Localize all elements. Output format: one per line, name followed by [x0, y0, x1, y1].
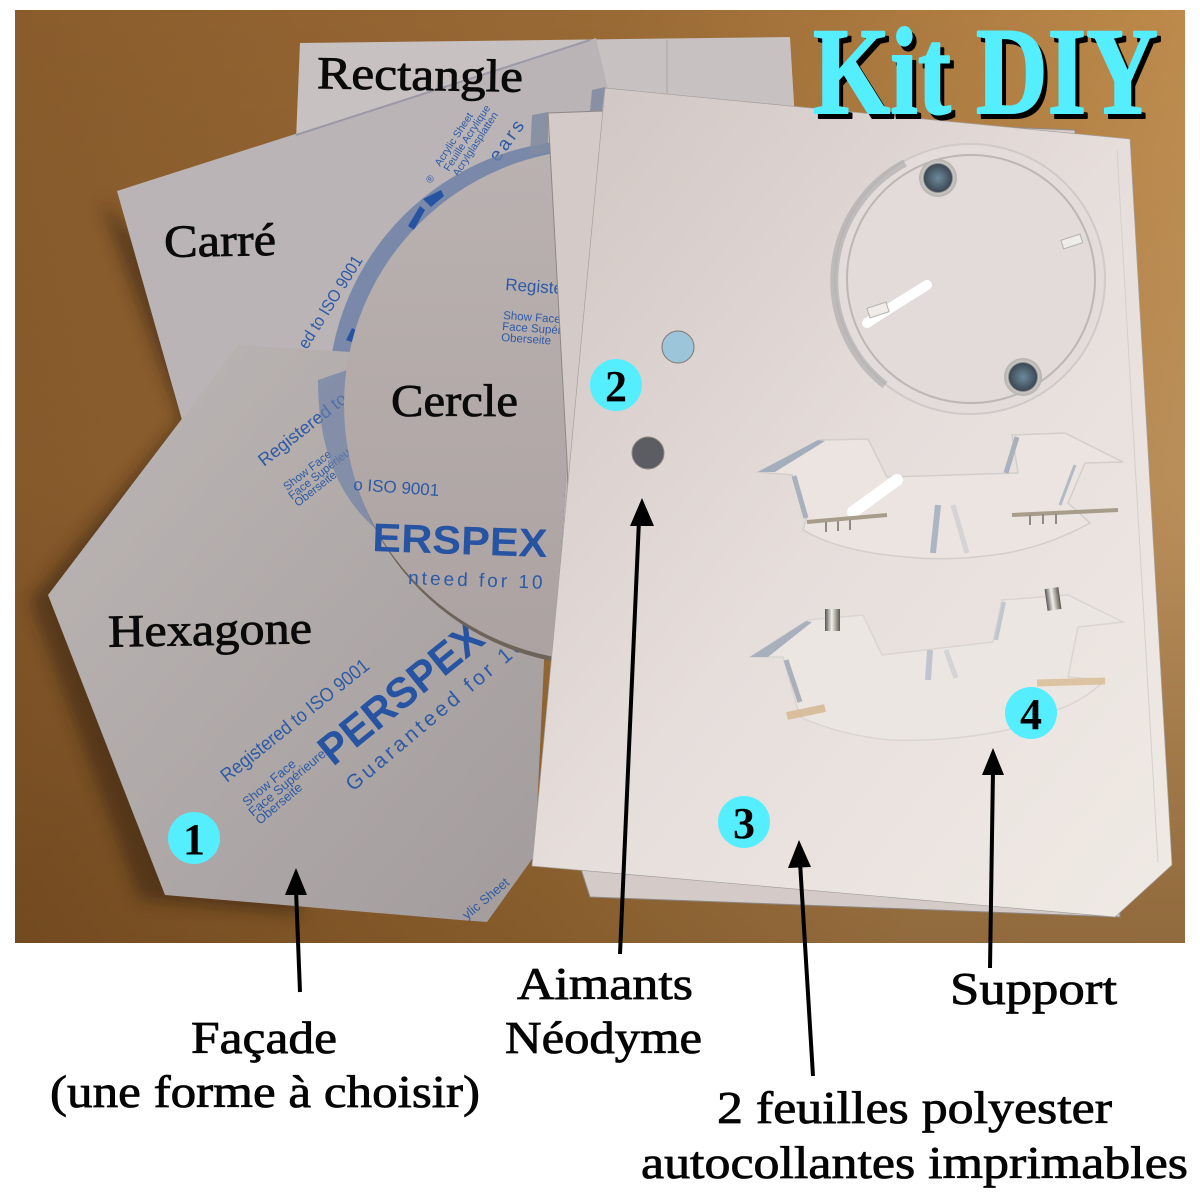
badge: number 3: 3 [733, 799, 755, 848]
text: hexagon blue print lower: Face Supérieure [245, 746, 329, 819]
icon: magnet top of circle [919, 159, 957, 197]
panel: sheet top shadows [530, 87, 605, 155]
text: circle blue print: Face Supérieure [502, 321, 587, 339]
text: hexagon blue print lower: Registered to ISO 9001 [216, 655, 374, 787]
arrow: support [982, 748, 1004, 968]
label: Hexagone: Hexagone [108, 602, 312, 657]
label: 2 feuilles polyester: 2 feuilles polyester [717, 1082, 1112, 1133]
icon: loose magnet dark [632, 437, 664, 469]
arrow: feuilles [788, 840, 813, 1076]
photo: wood table background [15, 10, 1185, 943]
label: Support: Support [950, 963, 1117, 1014]
panel: circle shadow over hexagon [318, 370, 377, 530]
text: hexagon blue print lower: Guaranteed for 10 [341, 631, 531, 796]
text: circle blue print: Show Face [503, 310, 561, 326]
panel: sticky sheet 1 (front) [532, 88, 1172, 917]
text: square sheet blue print: ears [485, 114, 531, 166]
label: autocollantes imprimables: autocollantes imprimables [641, 1137, 1188, 1188]
panel: circle acrylic sheet [344, 154, 566, 661]
panel: rectangle acrylic sheet [296, 37, 795, 140]
text: square sheet blue print: ed to ISO 9001 [294, 252, 367, 352]
icon: loose magnet light [662, 331, 694, 363]
text: circle blue print [353, 275, 588, 594]
text: circle blue print: nteed for 10 [408, 568, 546, 594]
text: square sheet blue print [294, 103, 531, 352]
label: Aimants: Aimants [517, 958, 693, 1009]
icon: acrylic support upper [758, 433, 1123, 559]
icon: acrylic support lower [750, 587, 1123, 740]
panel: sticky sheet 2 (back) [548, 111, 1120, 917]
label: Néodyme: Néodyme [505, 1012, 702, 1063]
text: hexagon blue print upper: Oberseite [292, 469, 339, 509]
panel: circle shadow [332, 142, 566, 537]
text: hexagon blue print upper: Face Supérieure [286, 441, 361, 502]
label: Rectangle: Rectangle [317, 47, 523, 102]
text: circle blue print: ERSPEX [372, 516, 548, 566]
icon: acrylic circle stand [834, 144, 1105, 414]
badge: number 1 [168, 812, 220, 864]
badge: number 4 [1005, 687, 1057, 739]
badge: number 4: 4 [1020, 690, 1042, 739]
label: Façade: Façade [191, 1012, 337, 1063]
text: hexagon blue print upper: Registered to [254, 388, 351, 470]
label: Carré: Carré [164, 214, 276, 267]
badge: number 3 [718, 796, 770, 848]
arrow: façade [285, 868, 307, 992]
text: hexagon blue print upper: Show Face [281, 448, 334, 493]
text: circle blue print: Oberseite [501, 332, 551, 347]
badge: number 1: 1 [183, 815, 205, 864]
panel: hexagon acrylic sheet [48, 345, 545, 922]
text: circle blue print: Registered [505, 275, 588, 300]
text: hexagon blue print lower [216, 613, 531, 922]
text: hexagon blue print upper [254, 388, 361, 509]
label: Cercle: Cercle [391, 375, 518, 426]
badge: number 2 [590, 359, 642, 411]
text: hexagon blue print lower: ylic Sheet [459, 874, 512, 922]
text: hexagon blue print lower: PERSPEX [309, 613, 493, 775]
text: hexagon blue print lower: Show Face [239, 756, 299, 809]
text: square sheet blue print: Acrylic Sheet [432, 111, 476, 169]
label: une forme à choisir: (une forme à choisir) [50, 1066, 480, 1117]
badge: number 2: 2 [605, 362, 627, 411]
text: hexagon blue print lower: Oberseite [252, 780, 305, 827]
icon: fragments of big blue lettering on square sheet [346, 190, 444, 342]
icon: magnet bottom of circle [1004, 358, 1042, 396]
text: square sheet blue print: Acrylglasplatten [450, 110, 501, 179]
arrow: aimants [620, 498, 654, 954]
panel: square acrylic sheet [117, 38, 667, 640]
text: circle blue print: o ISO 9001 [353, 475, 440, 500]
text: square sheet blue print: Feuille Acrylique [441, 103, 493, 174]
text: square sheet blue print: ® [424, 173, 438, 186]
